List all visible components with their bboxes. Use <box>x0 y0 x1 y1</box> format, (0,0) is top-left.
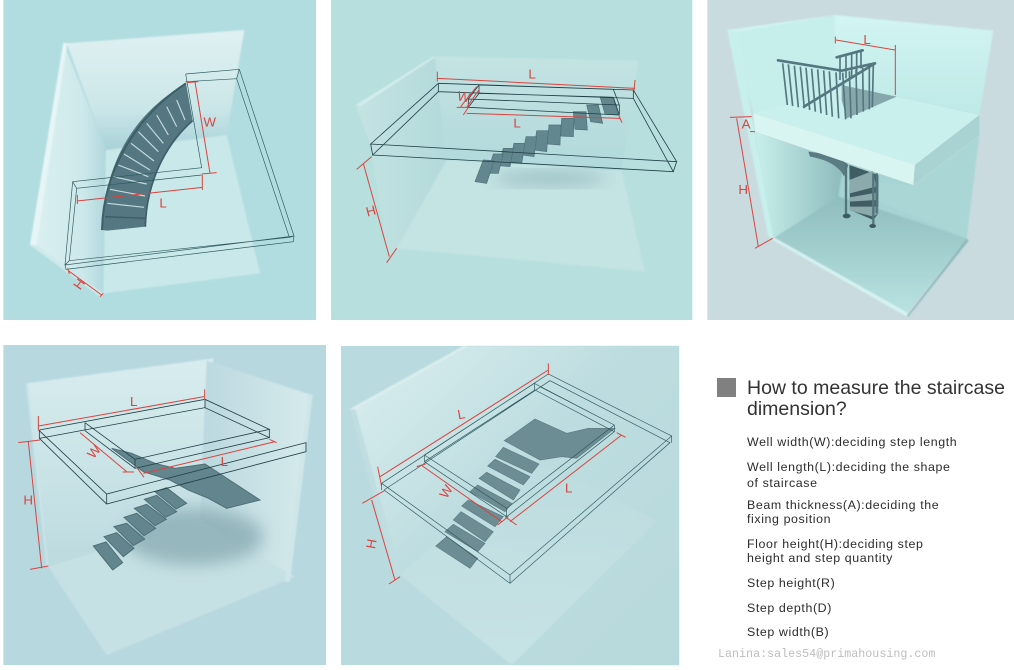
shadow under stair <box>493 172 607 184</box>
heading: dimension? <box>747 398 847 420</box>
text panel: how to measure <box>717 377 1005 661</box>
well wireframe <box>65 69 294 269</box>
red dimension lines: L <box>565 481 572 496</box>
icon: grey square bullet <box>717 378 736 397</box>
panel: L-shaped staircase with landing <box>3 345 326 665</box>
curved stair flight <box>102 83 193 231</box>
definition list: height and step quantity <box>747 551 893 565</box>
red dimension lines: L <box>863 32 871 47</box>
definition list: Beam thickness(A):deciding the <box>747 498 939 512</box>
red dimension lines: L <box>528 67 536 82</box>
red dimension lines <box>362 363 626 584</box>
heading: How to measure the staircase <box>747 377 1005 399</box>
panel: straight staircase <box>331 0 692 320</box>
red dimension lines: H <box>70 276 88 292</box>
floor shadow <box>123 508 263 565</box>
definition list: Step depth(D) <box>747 601 832 615</box>
stair treads <box>475 97 618 183</box>
definition list: Floor height(H):deciding step <box>747 537 924 551</box>
red dimension lines: L <box>221 454 228 469</box>
red dimension lines: W <box>436 482 456 501</box>
panel: spiral staircase <box>707 0 1014 320</box>
definition list: Step height(R) <box>747 576 835 590</box>
red dimension lines: H <box>738 182 748 197</box>
definition list <box>747 435 957 639</box>
red dimension lines: H <box>363 538 380 550</box>
red dimension lines: L <box>159 195 167 210</box>
walls and floor <box>26 358 313 655</box>
stair treads <box>436 419 615 568</box>
railing <box>778 50 875 119</box>
panel: U-shaped staircase from above <box>341 346 679 665</box>
red dimension lines: W <box>203 115 216 130</box>
definition list: Step width(B) <box>747 625 829 639</box>
red dimension lines: H <box>364 203 377 220</box>
well wireframe <box>39 399 306 504</box>
left and back walls with floor <box>30 30 260 297</box>
well wireframe <box>382 374 672 583</box>
upper walls <box>727 15 993 239</box>
red dimension lines: H <box>23 493 33 508</box>
red dimension lines: W <box>84 442 104 461</box>
red dimension lines <box>18 389 277 569</box>
red dimension lines: L <box>513 115 521 130</box>
panel: curved staircase <box>3 0 316 320</box>
definition list: of staircase <box>747 476 818 490</box>
red dimension lines: A <box>742 116 751 131</box>
red dimension lines: W <box>456 88 472 106</box>
red dimension lines <box>730 32 895 248</box>
slab wireframe <box>371 83 677 172</box>
red dimension lines <box>68 82 217 297</box>
stair treads <box>93 448 260 570</box>
definition list: Well length(L):deciding the shape <box>747 460 950 474</box>
red dimension lines: L <box>130 394 137 409</box>
spiral stair lower part <box>808 152 878 228</box>
slab <box>753 85 979 185</box>
red dimension lines <box>357 67 635 263</box>
definition list: Well width(W):deciding step length <box>747 435 957 449</box>
definition list: fixing position <box>747 512 831 526</box>
red dimension lines: L <box>456 406 466 422</box>
walls and floor <box>356 56 645 272</box>
watermark contact line: Lanina:sales54@primahousing.com <box>718 647 935 661</box>
lower walls and floor <box>755 132 979 317</box>
wall and floor <box>349 346 679 665</box>
